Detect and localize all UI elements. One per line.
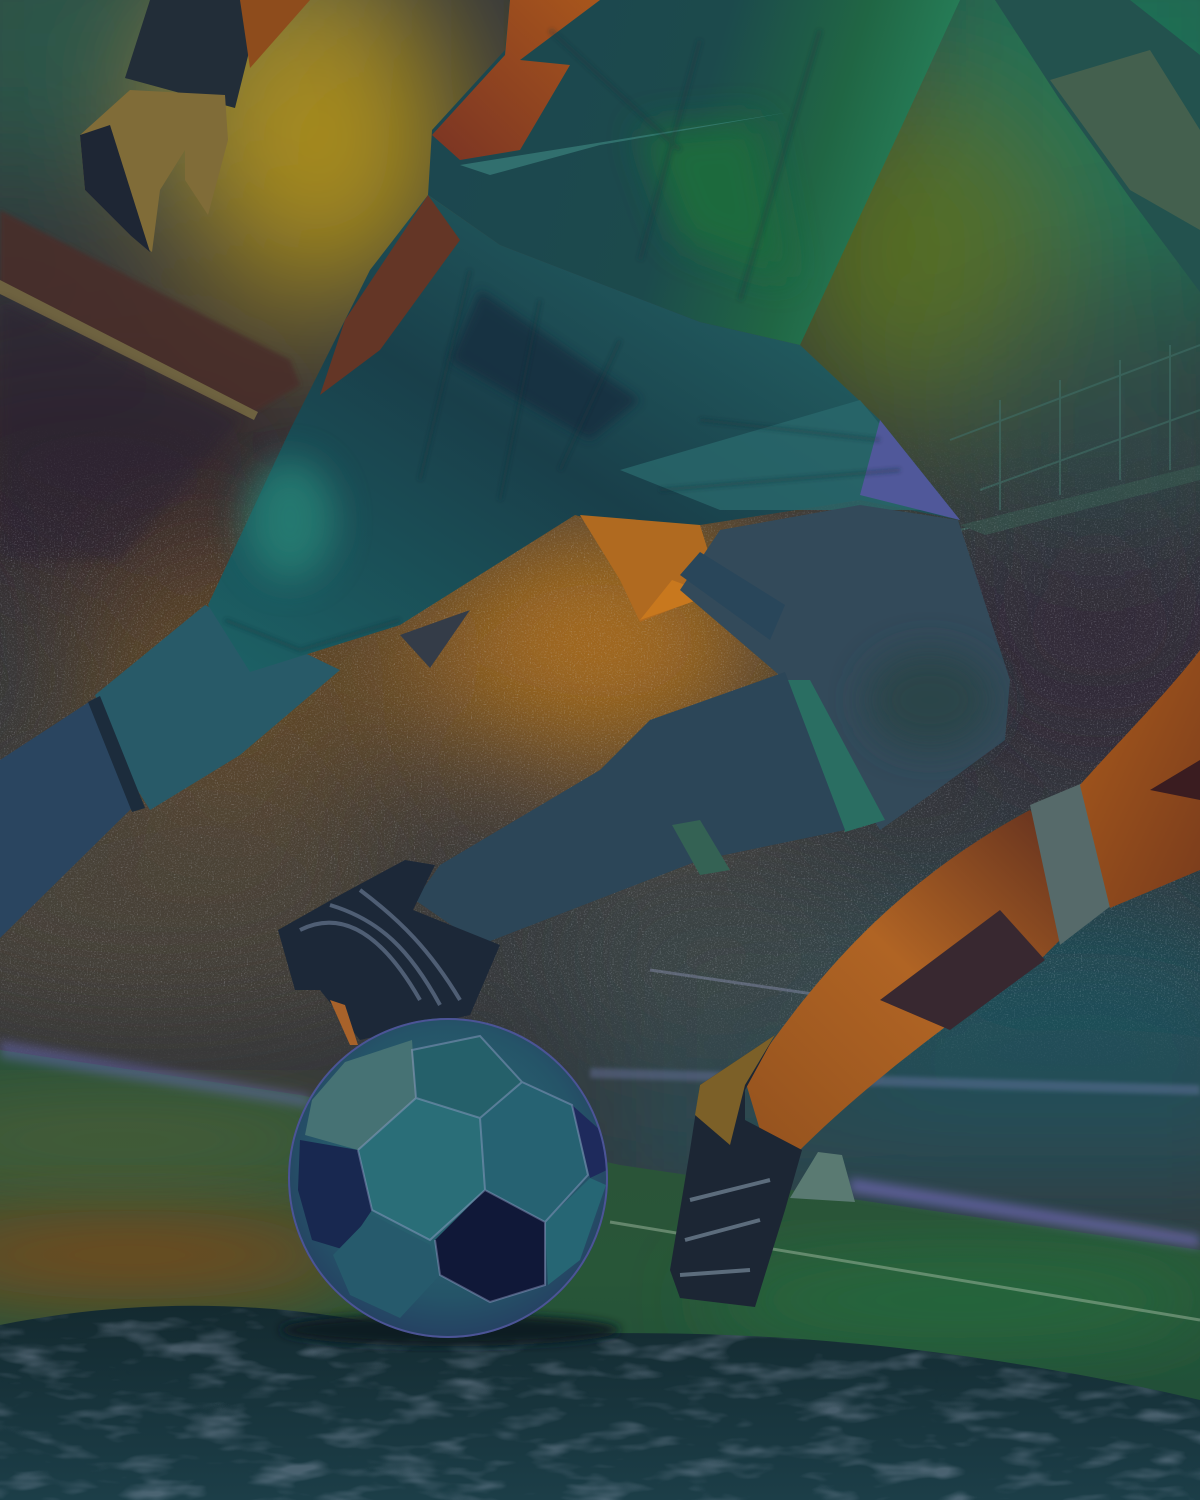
stadium stand right [950, 345, 1200, 535]
ball shadow [280, 1314, 620, 1346]
player: front leg [745, 650, 1200, 1150]
player: front boot [670, 1035, 802, 1307]
player: undershorts [680, 505, 1010, 832]
player: standing calf [415, 672, 845, 945]
goal in distance [790, 1152, 855, 1202]
pitch lines and haze [0, 970, 1200, 1320]
player: trailing leg [0, 605, 340, 938]
foreground ground [0, 1300, 1200, 1500]
player: left arm and glove [80, 0, 310, 252]
player: jersey [428, 0, 960, 345]
player: orange shorts lining [580, 515, 720, 622]
stadium roof structure left [0, 210, 300, 560]
football [288, 1018, 608, 1338]
player: shorts [208, 195, 960, 672]
crowd speckle [0, 420, 1200, 1080]
pitch [0, 1050, 1200, 1500]
player: boot on ball [278, 860, 500, 1045]
player: right arm [995, 0, 1200, 292]
